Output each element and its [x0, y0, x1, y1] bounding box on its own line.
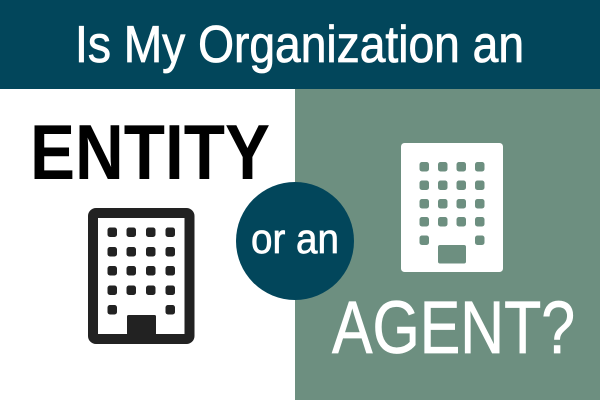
- title: Is My Organization an: [75, 15, 524, 73]
- title banner: [0, 0, 600, 89]
- icon: white building: [401, 143, 503, 272]
- icon: dark building: [93, 213, 190, 339]
- badge text: or an: [251, 215, 339, 262]
- connector badge: [236, 182, 354, 300]
- heading: entity: ENTITY: [30, 108, 270, 196]
- panel: agent background: [295, 89, 600, 400]
